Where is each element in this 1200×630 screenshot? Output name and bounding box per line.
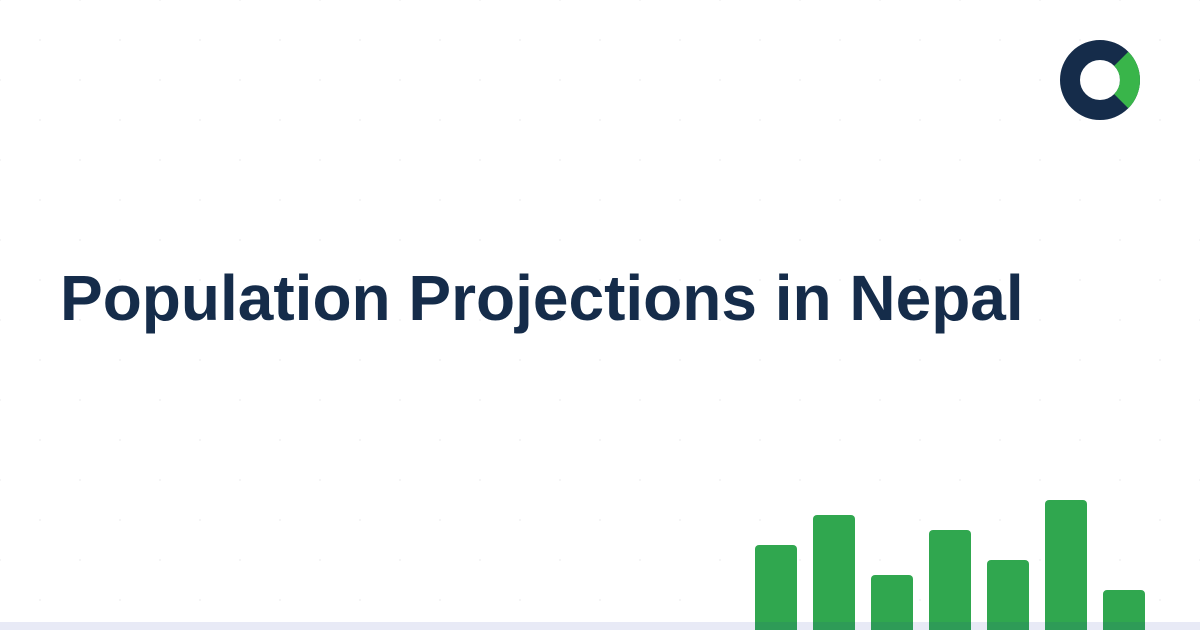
title: Population Projections in Nepal [60, 262, 1024, 334]
bar chart [755, 500, 1145, 630]
bottom strip [0, 622, 1200, 630]
logo: donut icon [1070, 50, 1140, 110]
